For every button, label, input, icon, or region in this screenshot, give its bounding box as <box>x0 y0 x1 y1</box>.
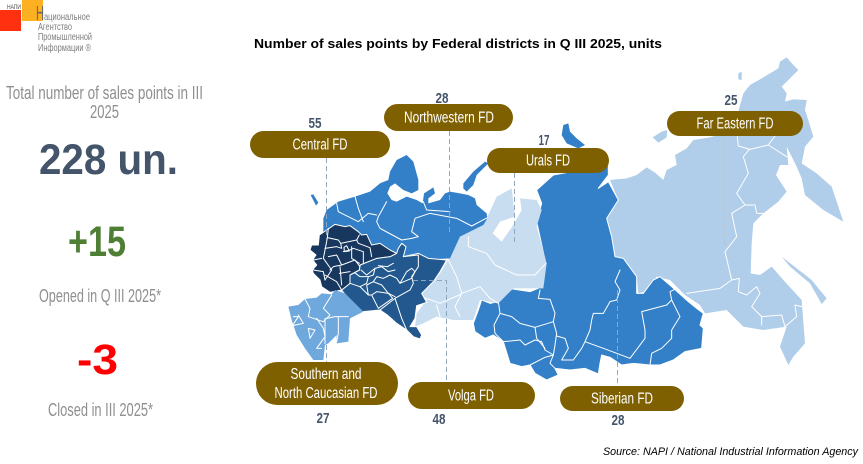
region: Urals FD <box>415 188 547 327</box>
label: Southern and North Caucasian FD <box>256 362 398 427</box>
closed value: -3 <box>77 336 118 384</box>
label: Far Eastern FD: Far Eastern FD <box>696 116 774 132</box>
label: Urals FD: Urals FD <box>526 152 570 170</box>
logo: ациональное <box>44 12 90 23</box>
source note: Source: NAPI / National Industrial Information Agency <box>603 446 859 458</box>
region: Northwestern FD <box>311 155 488 263</box>
logo <box>0 0 92 54</box>
label: Central FD: Central FD <box>292 136 348 154</box>
label: Far Eastern FD: 25 <box>724 92 738 109</box>
opened value: +15 <box>68 218 126 266</box>
logo: Промышленной <box>38 32 92 43</box>
label: Northwestern FD <box>384 90 513 131</box>
title: Number of sales points by Federal districts in Q III 2025, units <box>254 36 662 51</box>
region: Far Eastern FD <box>607 57 843 365</box>
label: Volga FD: 48 <box>432 411 446 428</box>
logo: НАПИ <box>7 5 21 11</box>
total value: 228 un. <box>39 136 178 184</box>
logo: Агентство <box>38 22 72 33</box>
label: Urals FD: 17 <box>538 132 550 149</box>
total label: Total number of sales points in III <box>6 83 203 103</box>
label: Far Eastern FD <box>667 92 803 136</box>
label: Northwestern FD: 28 <box>436 90 448 107</box>
logo: Информации ® <box>38 42 91 54</box>
label: Urals FD <box>487 132 609 173</box>
total label <box>6 83 203 122</box>
label: Volga FD: Volga FD <box>448 388 494 404</box>
label: Central FD: 55 <box>308 115 322 132</box>
label: Siberian FD: 28 <box>612 412 624 429</box>
label: Siberian FD <box>560 386 684 429</box>
label: Southern and North Caucasian FD: 27 <box>316 410 330 427</box>
label: Siberian FD: Siberian FD <box>591 390 653 408</box>
label: Southern and North Caucasian FD: Southern and <box>290 366 362 383</box>
opened label: Opened in Q III 2025* <box>39 286 161 306</box>
total label: 2025 <box>90 102 119 122</box>
logo: Н <box>36 3 44 25</box>
closed label: Closed in III 2025* <box>48 400 153 420</box>
region: Volga FD <box>342 243 447 339</box>
region: Siberian FD <box>473 123 703 380</box>
region: Central FD <box>310 224 397 292</box>
label: Northwestern FD: Northwestern FD <box>404 110 494 126</box>
leader lines <box>326 131 724 386</box>
panel: totals <box>6 83 203 420</box>
label: Central FD <box>250 115 390 158</box>
region: Southern and North Caucasian FD <box>288 290 363 360</box>
label: Volga FD <box>408 382 535 428</box>
map of federal districts <box>288 57 843 380</box>
label: Southern and North Caucasian FD: North Caucasian FD <box>274 385 378 402</box>
